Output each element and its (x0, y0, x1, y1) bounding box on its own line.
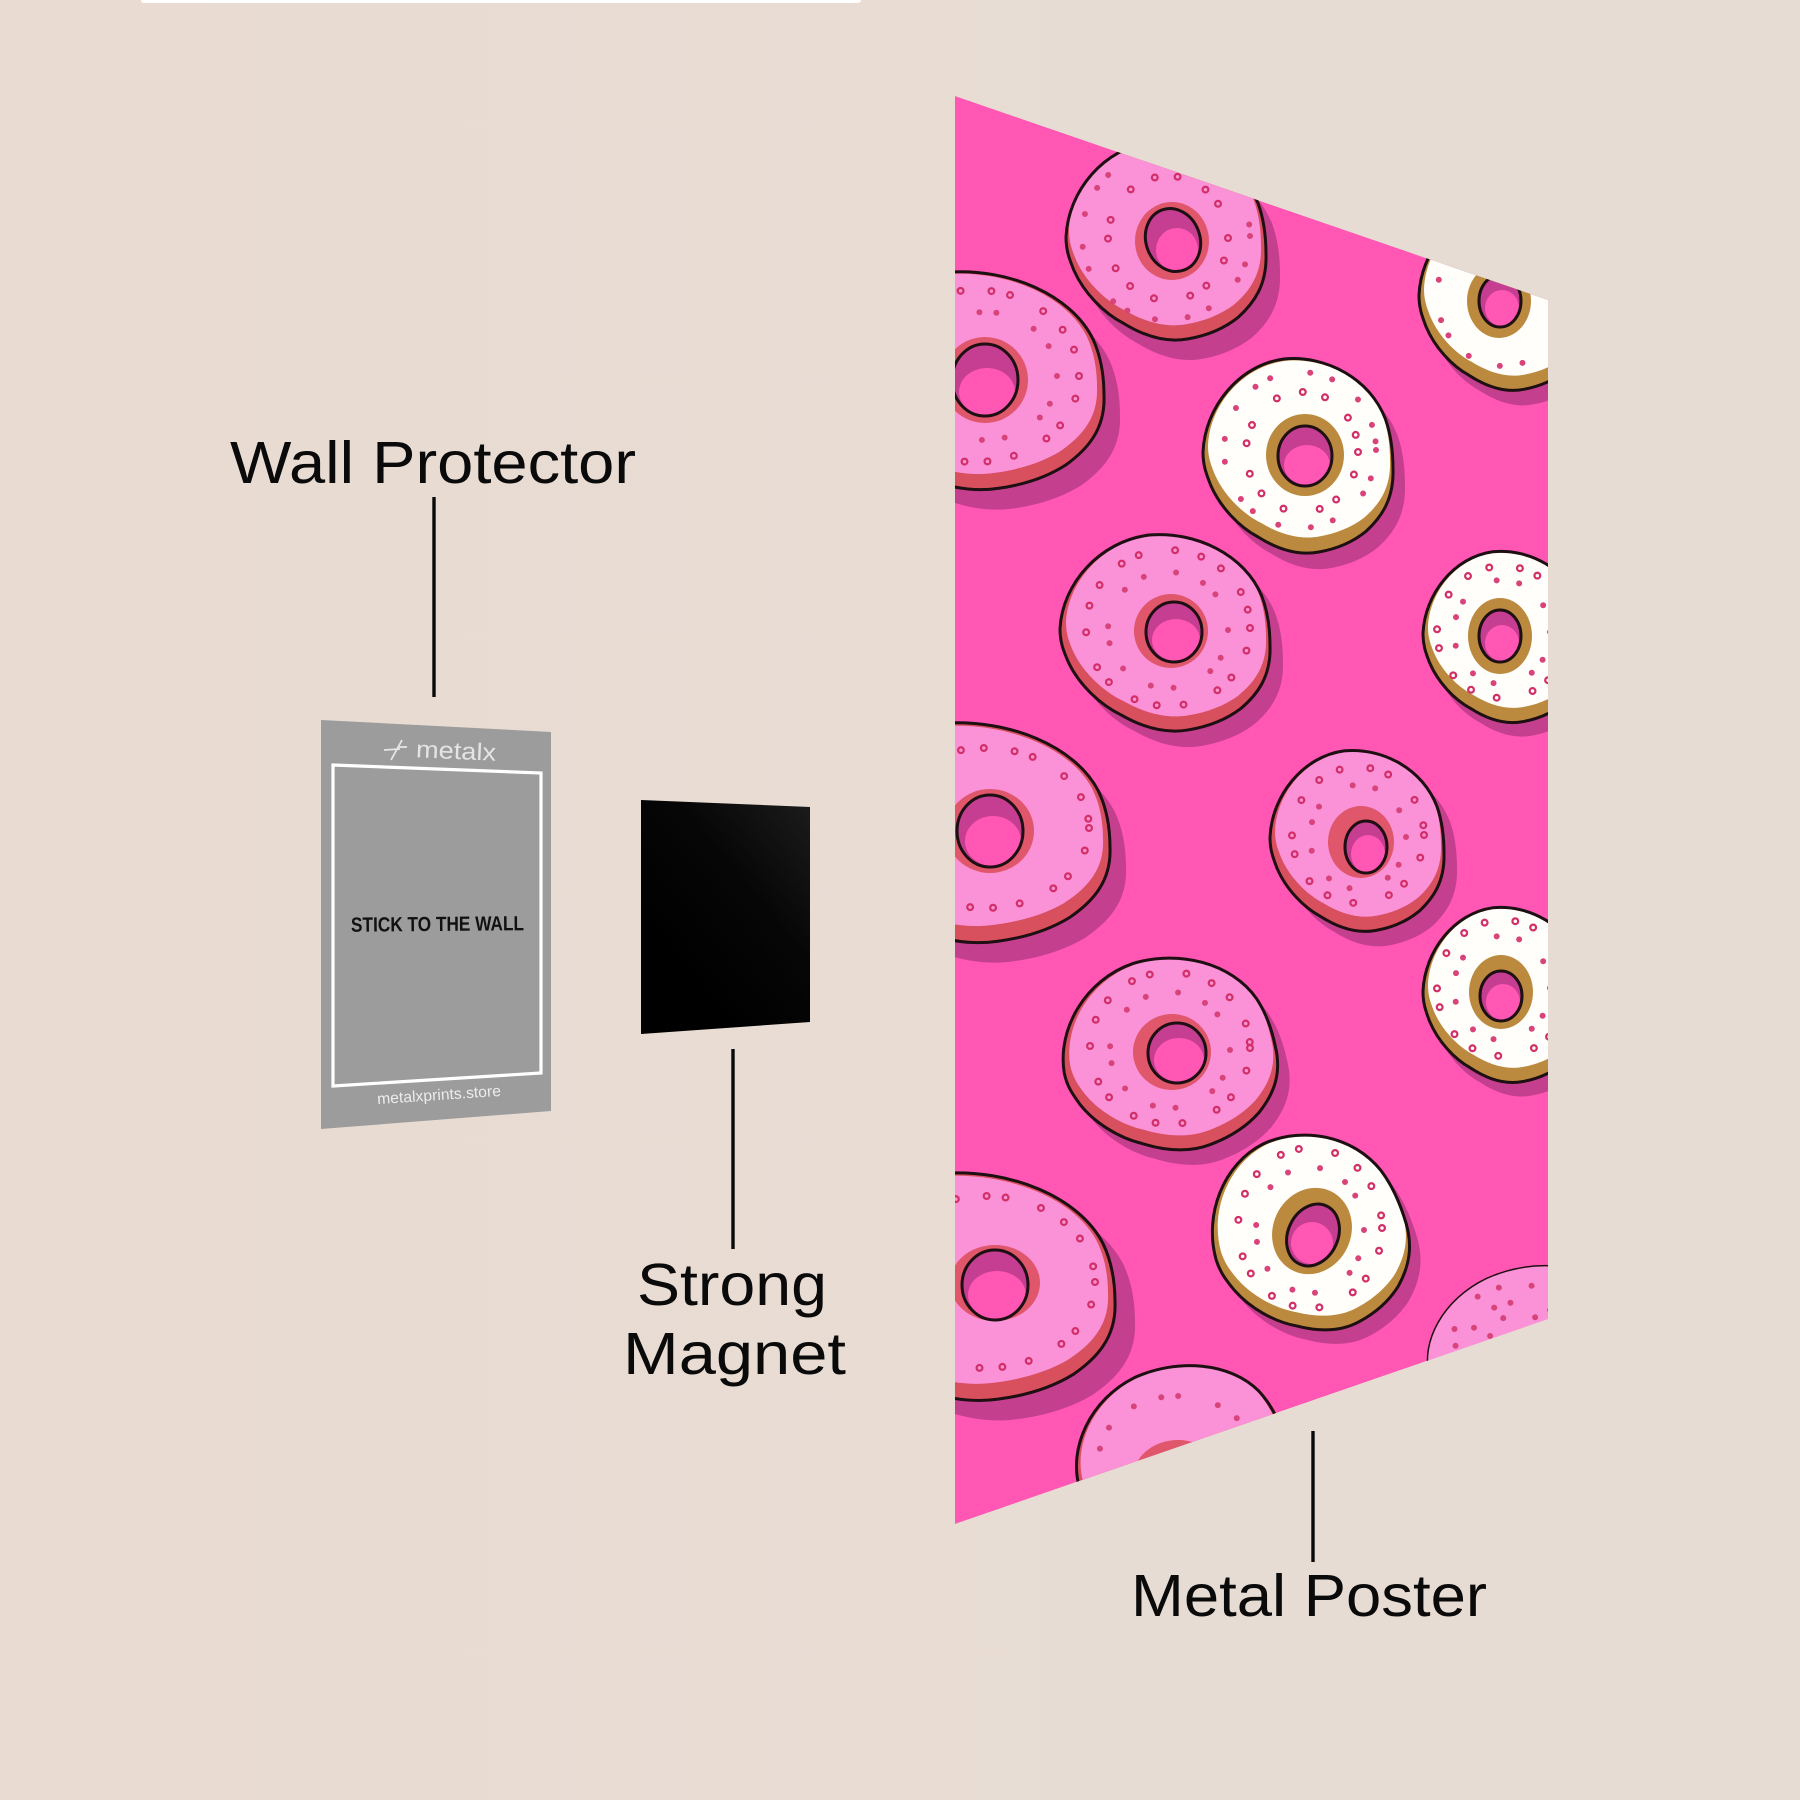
donut: bottom right pink (1426, 1264, 1548, 1361)
donut: bottom pink (1074, 1364, 1276, 1482)
donut: left pink 2 (955, 721, 1126, 963)
donut: left pink 1 (955, 270, 1120, 510)
donut: white lower centre (1210, 1134, 1420, 1344)
donut: top right white (1418, 258, 1548, 406)
label: Wall Protector: Wall Protector (230, 430, 636, 496)
donut: pink centre 2 (1062, 956, 1290, 1165)
donut: top pink (1066, 142, 1280, 360)
label: Strong Magnet: Strong (637, 1252, 827, 1318)
top white strip (141, 0, 861, 3)
donut: right white 2 (1422, 906, 1548, 1096)
logo mark (384, 740, 407, 760)
label: Metal Poster: Metal Poster (1131, 1563, 1487, 1629)
donut: left pink 3 (955, 1171, 1136, 1420)
sticker instruction: STICK TO THE WALL (351, 912, 524, 937)
donut: pink right centre (1270, 750, 1457, 946)
panel: metal poster with donuts (955, 96, 1548, 1524)
donut: white upper centre (1203, 359, 1405, 569)
label: Strong Magnet (623, 1049, 846, 1387)
panel: strong magnet (641, 800, 810, 1034)
label: Strong Magnet: Magnet (623, 1321, 846, 1387)
logo wordmark: metalx (416, 736, 497, 767)
donut: pink centre 1 (1060, 535, 1283, 747)
website: metalxprints.store (377, 1083, 501, 1108)
panel: wall protector sheet (321, 720, 551, 1129)
donut: right white 1 (1422, 550, 1548, 737)
